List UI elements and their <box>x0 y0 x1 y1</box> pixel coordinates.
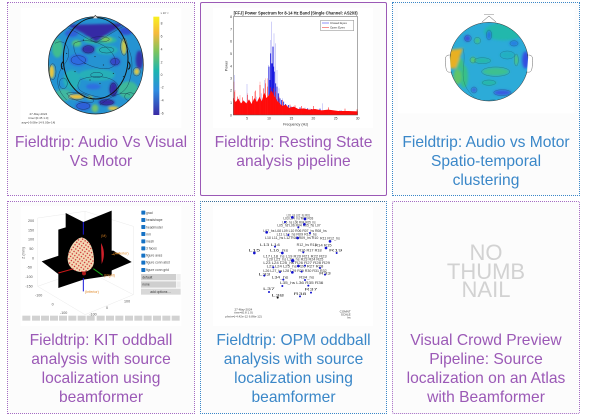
dropdowns and button: default <box>142 275 152 279</box>
thumbnail: 3D source model viewer: Z (mm) <box>21 247 25 259</box>
sensor labels: R19 <box>329 249 343 253</box>
scale glyph: SCALE <box>341 313 351 317</box>
thumbnail: topographic map with colorbar: -6 <box>161 112 164 116</box>
thumbnail: 3D source model viewer: -100 <box>25 275 33 279</box>
title: analysis with source <box>224 351 363 368</box>
blue spectrum <box>234 22 355 115</box>
3D axes box <box>38 211 133 315</box>
sensor labels: L07_hs L08 L09 L10 R06 R07_hs R08_hs <box>263 229 327 233</box>
thumbnail: 3D source model viewer: 3 faces <box>146 247 157 251</box>
thumbnail: 3D source model viewer: 100 <box>28 238 34 242</box>
sensor labels: L20 L21_hs L22_hs R23 R24 R25 <box>267 257 323 261</box>
scale glyph: hs <box>347 316 351 320</box>
dropdowns and button <box>141 274 181 295</box>
red spectrum <box>233 91 358 115</box>
annotation text: time=[0.8 1.0] <box>234 311 253 315</box>
thumbnail: 3D source model viewer: -50 <box>27 266 32 270</box>
card: OPM oddball analysis <box>200 201 387 414</box>
thumbnail: 3D source model viewer: (Anterior) <box>113 252 129 256</box>
title: Fieldtrip: Audio Vs Visual <box>15 134 187 151</box>
card: Audio Vs Visual Vs Motor <box>7 2 195 196</box>
sensor labels: L15 <box>248 249 260 253</box>
option checkboxes <box>141 211 145 272</box>
thumbnail: 3D source model viewer: 50 <box>29 247 33 251</box>
sensor labels: L03 L04_hs R02 R03 <box>283 216 313 220</box>
scale glyph: COMNT <box>340 310 351 314</box>
sensor labels: L01_hs L02_hs R01 <box>287 214 310 218</box>
thumbnail: topographic map with colorbar: 27-May-2024 <box>29 112 47 116</box>
title: beamformer <box>59 389 143 406</box>
thumbnail: power spectrum chart: Closed Eyes <box>330 21 347 25</box>
title: clustering <box>453 172 519 189</box>
thumbnail: topographic map with colorbar: 8 <box>161 22 163 26</box>
thumbnail: 3D source model viewer: figure conn grid <box>146 268 169 272</box>
thumbnail: power spectrum chart: 25 <box>334 116 338 120</box>
sensor labels: L11 L12_hs R09 R10_hs <box>277 232 317 236</box>
title: localization on an Atlas <box>407 370 565 387</box>
card: Audio vs Motor Spatio-temporal clustering <box>392 2 580 196</box>
sensor labels: R38 <box>294 292 307 296</box>
title: analysis with source <box>31 351 171 368</box>
thumbnail: 3D source model viewer: figure axes <box>146 254 163 258</box>
sensor labels: L05_hs L06 R04 R05_hs L07 <box>277 224 321 228</box>
thumbnail: 3D source model viewer: -150 <box>25 284 33 288</box>
thumbnail: topographic map with colorbar: time=[0.45 1.0] <box>28 116 48 120</box>
sensor labels: R37 <box>305 288 318 292</box>
thumbnail: 3D source model viewer: 150 <box>28 228 34 232</box>
thumbnail: 3D source model viewer <box>21 210 181 321</box>
thumbnail: 3D source model viewer: 200 <box>28 219 34 223</box>
sensor dots <box>253 216 338 299</box>
title <box>402 134 570 189</box>
black slice planes <box>42 211 132 288</box>
no thumbnail placeholder: NO <box>470 240 502 265</box>
card: KIT oddball analysis <box>7 201 195 414</box>
thumbnail: 3D source model viewer: 0 <box>52 302 54 306</box>
sensor labels: R11 R12_hs <box>320 237 340 241</box>
title: Visual Crowd Preview <box>410 332 562 349</box>
title: Fieldtrip: OPM oddball <box>216 332 371 349</box>
thumbnail: power spectrum chart: 5 <box>246 116 248 120</box>
thumbnail: power spectrum chart: Frequency (Hz) <box>283 122 308 126</box>
thumbnail: power spectrum chart: 8 <box>230 15 232 19</box>
title <box>30 332 172 406</box>
thumbnail: power spectrum chart: 4 <box>230 64 232 68</box>
thumbnail: 3D source model viewer: figure conn abst <box>146 261 170 265</box>
thumbnail: sensor layout <box>225 214 351 320</box>
sensor labels: L23 L24 L25_hs R26 R27 R28 R29 <box>263 261 330 265</box>
title: localization using <box>42 370 160 387</box>
thumbnail: 3D source model viewer: 100 <box>124 300 130 304</box>
title <box>407 332 565 406</box>
thumbnail: power spectrum chart: 10 <box>267 116 271 120</box>
no thumbnail placeholder <box>447 240 525 302</box>
no thumbnail placeholder: THUMB <box>447 258 525 284</box>
title <box>15 134 187 170</box>
sensor labels: L37 <box>263 287 275 291</box>
title: Vs Motor <box>70 153 132 170</box>
thumbnail: topographic map with colorbar: 6 <box>161 35 163 39</box>
thumbnail: 3D source model viewer: 0 <box>106 306 108 310</box>
sensor labels: L17 L18_hs L19 R20 R21 R22 R23 <box>263 255 327 259</box>
thumbnail: power spectrum chart: 0 <box>230 113 232 117</box>
thumbnail: power spectrum chart: 15 <box>289 116 293 120</box>
title: Fieldtrip: KIT oddball <box>30 332 172 349</box>
thumbnail: power spectrum chart: 2 <box>230 89 232 93</box>
thumbnail: 3D source model viewer: mesh <box>146 239 154 243</box>
thumbnail: power spectrum chart: 5 <box>230 52 232 56</box>
sensor labels: L26 L27_hs L28 L29 R29 R30 R31 R32 <box>263 269 327 273</box>
sensor labels: L05_hs L06 R04 R05_hs <box>282 220 316 224</box>
title <box>215 134 372 170</box>
no thumbnail placeholder: NAIL <box>462 277 510 302</box>
annotation text: pfmin=[-4.42e-12 6.86e-12] <box>225 315 262 319</box>
title: beamformer <box>251 389 336 406</box>
thumbnail: topographic map with colorbar <box>21 11 170 124</box>
thumbnail: 3D source model viewer: 0 <box>32 256 34 260</box>
thumbnail: topographic map with colorbar: 2 <box>161 60 163 64</box>
card: Resting State analysis pipeline <box>200 2 387 196</box>
thumbnail: 3D source model viewer: -100 <box>89 312 97 316</box>
thumbnail: 3D source model viewer: (M) <box>101 234 106 238</box>
title: Spatio-temporal <box>431 153 541 170</box>
sensor labels: L10 L11_hs L12 R08 R09_hs R10 <box>265 236 318 240</box>
title: Pipeline: Source <box>429 351 543 368</box>
thumbnail: topographic map with colorbar: avg=[-9.08e-14 9.05e-14] <box>21 120 55 124</box>
sensor labels: L34_hs <box>272 276 289 280</box>
thumbnail: 3D source model viewer: -100 <box>60 311 67 315</box>
dropdowns and button: none <box>142 283 150 287</box>
thumbnail: 3D source model viewer: mri <box>146 232 151 236</box>
sensor labels: L35_hs L36 R35 R36 <box>280 281 324 285</box>
thumbnail: 3D source model viewer: headmodel <box>146 225 163 229</box>
sensor labels: R33 <box>319 272 331 276</box>
title: localization using <box>234 370 353 387</box>
sensor labels: L33 <box>258 272 270 276</box>
thumbnail: topographic map with colorbar: -4 <box>161 98 164 102</box>
thumbnail: power spectrum chart: Open Eyes <box>330 26 345 30</box>
scale glyph <box>340 310 351 320</box>
thumbnail: 3D source model viewer: headshape <box>146 218 163 222</box>
title: with Beamformer <box>427 389 545 406</box>
sensor labels: R12_hs R13 <box>297 243 317 247</box>
thumbnail: 3D source model viewer: (Right) <box>104 274 115 278</box>
sensor labels: R16 R17 R18 <box>298 249 322 253</box>
sensor labels: R14 R15 <box>315 244 332 248</box>
thumbnail: power spectrum chart: 20 <box>311 116 315 120</box>
thumbnail: topographic map with colorbar: x 10⁻¹⁴ <box>161 11 170 15</box>
sensor labels <box>248 214 343 298</box>
dropdowns and button: add options ... <box>150 290 171 294</box>
annotation text <box>225 307 262 319</box>
thumbnail: topographic map with colorbar: 4 <box>161 48 163 52</box>
sensor labels: L38 <box>271 294 284 298</box>
brain egg with dots <box>68 237 94 272</box>
viewer buttons <box>22 316 180 321</box>
sensor labels: R34_hs <box>299 276 315 280</box>
thumbnail: topographic map with colorbar: -2 <box>161 86 164 90</box>
thumbnail: topographic map with colorbar: 0 <box>161 73 163 77</box>
thumbnail: power spectrum chart: 1 <box>230 101 232 105</box>
title: analysis pipeline <box>236 153 351 170</box>
thumbnail: topographic head map <box>445 14 533 102</box>
thumbnail: power spectrum chart <box>224 11 360 126</box>
thumbnail: power spectrum chart: 30 <box>356 116 360 120</box>
thumbnail: 3D source model viewer: (Inferior) <box>85 290 99 294</box>
title <box>216 332 371 406</box>
sensor labels: L16_hs <box>270 249 289 253</box>
annotation text: 27-May-2024 <box>234 307 252 311</box>
thumbnail: power spectrum chart: 6 <box>230 40 232 44</box>
card: Visual Crowd Preview Pipeline <box>392 201 580 414</box>
thumbnail: 3D source model viewer: -100 <box>35 293 42 297</box>
thumbnail: power spectrum chart: 7 <box>230 27 232 31</box>
thumbnail: power spectrum chart: 3 <box>230 77 232 81</box>
thumbnail: 3D source model viewer: grad <box>146 211 153 215</box>
thumbnail: power spectrum chart: Power <box>224 60 228 71</box>
sensor labels: L23 L24 L25_hs R26 R27 R28 <box>267 264 324 268</box>
sensor labels: L13 L14 <box>260 243 280 247</box>
title: Fieldtrip: Audio vs Motor <box>402 134 570 151</box>
title: Fieldtrip: Resting State <box>215 134 372 151</box>
thumbnail: power spectrum chart: [FFJ] Power Spectrum for 8-14 Hz Band (Single Channel: AS203) <box>234 11 358 16</box>
